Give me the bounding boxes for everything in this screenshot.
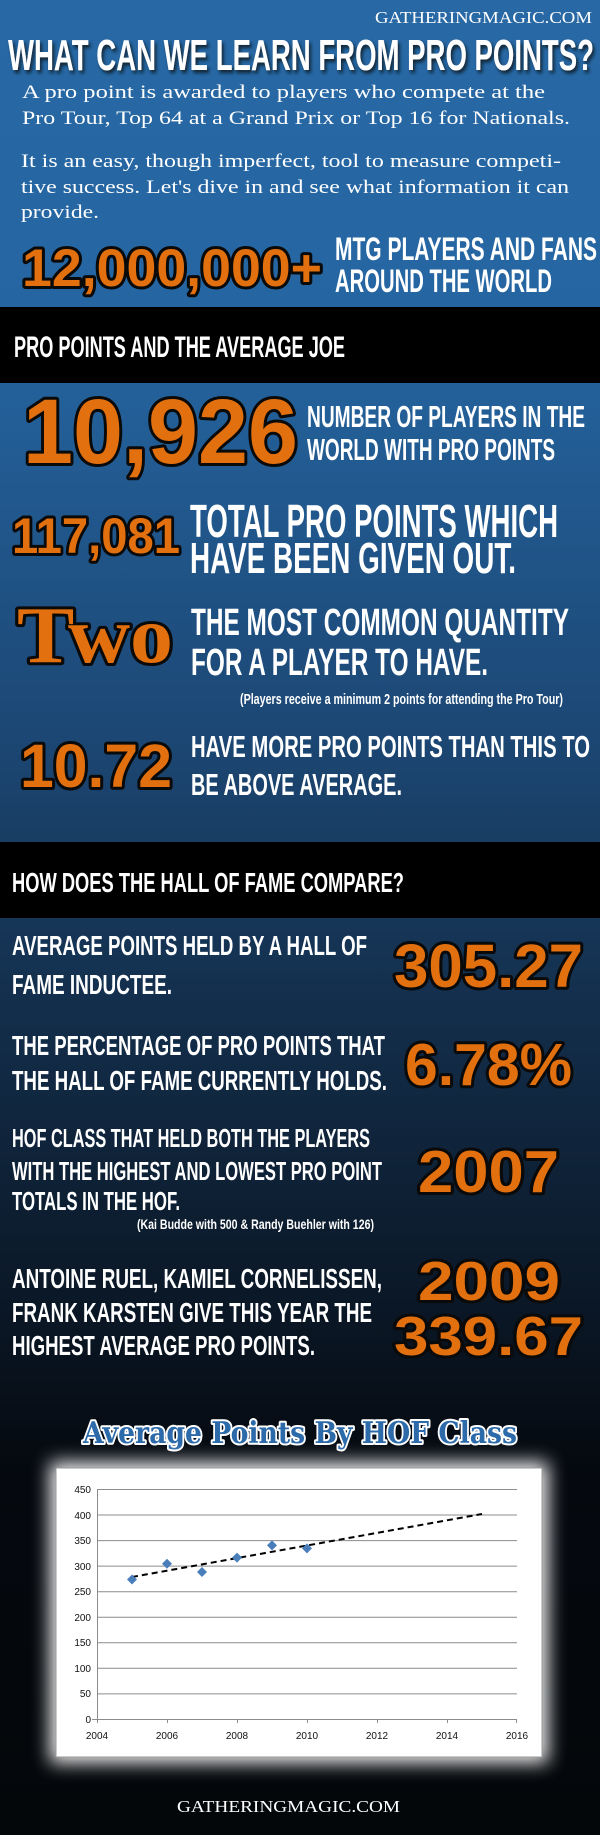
chart: average points by HOF class: 150	[74, 1638, 91, 1649]
hof stat: percentage: THE PERCENTAGE OF PRO POINTS THAT	[12, 1030, 385, 1061]
stat: 10.72: BE ABOVE AVERAGE.	[191, 767, 402, 802]
chart: average points by HOF class: 2008	[226, 1731, 249, 1742]
section band: average joe: PRO POINTS AND THE AVERAGE JOE	[14, 331, 345, 364]
hof stat: class 2009	[12, 1250, 583, 1367]
intro text: Pro Tour, Top 64 at a Grand Prix or Top 16 for Nationals.	[22, 108, 570, 129]
hof stat: average points: AVERAGE POINTS HELD BY A HALL OF	[12, 930, 367, 961]
hof stat: class 2009: 2009	[418, 1250, 560, 1312]
chart: average points by HOF class: 2012	[366, 1731, 389, 1742]
hof stat: class 2007: HOF CLASS THAT HELD BOTH THE PLAYERS	[12, 1123, 370, 1153]
chart: average points by HOF class: 400	[74, 1511, 91, 1522]
hof stat: class 2009: 339.67	[394, 1305, 583, 1367]
hof stat: class 2009: ANTOINE RUEL, KAMIEL CORNELISSEN,	[12, 1263, 382, 1294]
chart: average points by HOF class: 450	[74, 1485, 91, 1496]
hof stat: class 2007: 2007	[418, 1139, 559, 1205]
stat: 117,081: 117,081	[12, 508, 180, 564]
chart title: Average Points By HOF Class	[82, 1416, 517, 1451]
stat: 10,926: 10,926	[23, 381, 298, 483]
section band: average joe	[0, 307, 600, 383]
stat: Two: Two	[17, 592, 173, 680]
footer: site name: GATHERINGMAGIC.COM	[177, 1797, 400, 1816]
chart: average points by HOF class: 50	[80, 1689, 91, 1700]
header: site name: GATHERINGMAGIC.COM	[375, 8, 592, 27]
stat: 12,000,000+ players: 12,000,000+	[22, 239, 322, 298]
intro text: It is an easy, though imperfect, tool to measure competi-	[21, 151, 561, 172]
intro text: provide.	[21, 202, 99, 223]
chart: average points by HOF class: 2004	[86, 1731, 109, 1742]
intro text: tive success. Let's dive in and see what information it can	[21, 177, 570, 198]
hof stat: average points: FAME INDUCTEE.	[12, 969, 172, 1000]
hof stat: percentage	[12, 1030, 572, 1098]
chart: average points by HOF class: 2014	[436, 1731, 459, 1742]
chart: average points by HOF class: 250	[74, 1587, 91, 1598]
intro text: A pro point is awarded to players who compete at the	[22, 82, 545, 103]
hof stat: class 2007	[12, 1123, 559, 1232]
hof stat: class 2009: FRANK KARSTEN GIVE THIS YEAR THE	[12, 1297, 372, 1328]
section band: hall of fame: HOW DOES THE HALL OF FAME COMPARE?	[12, 867, 404, 898]
stat: 117,081	[12, 495, 558, 583]
hof stat: class 2007: WITH THE HIGHEST AND LOWEST PRO POINT	[12, 1156, 382, 1186]
stat: 10.72: 10.72	[20, 732, 172, 800]
hof stat: class 2009: HIGHEST AVERAGE PRO POINTS.	[12, 1330, 315, 1361]
stat: 10,926	[23, 381, 585, 483]
chart: average points by HOF class: 350	[74, 1536, 91, 1547]
hof stat: class 2007: TOTALS IN THE HOF.	[12, 1186, 180, 1216]
intro text	[21, 82, 570, 223]
chart: average points by HOF class: 300	[74, 1562, 91, 1573]
chart: average points by HOF class: 2016	[506, 1731, 529, 1742]
chart: average points by HOF class: 0	[85, 1715, 91, 1726]
hof stat: class 2007: (Kai Budde with 500 & Randy Buehler with 126)	[137, 1216, 374, 1232]
chart: average points by HOF class: 100	[74, 1664, 91, 1675]
chart: average points by HOF class: 2010	[296, 1731, 319, 1742]
chart: average points by HOF class: 200	[74, 1613, 91, 1624]
hof stat: average points: 305.27	[394, 932, 583, 1000]
stat: 10.72	[20, 729, 590, 802]
hof stat: percentage: 6.78%	[405, 1032, 572, 1098]
chart: average points by HOF class	[50, 1462, 548, 1763]
section band: hall of fame	[0, 842, 600, 918]
hof stat: average points	[12, 930, 583, 1000]
chart: average points by HOF class: 2006	[156, 1731, 179, 1742]
hof stat: percentage: THE HALL OF FAME CURRENTLY HOLDS.	[12, 1065, 387, 1096]
stat: Two	[17, 592, 569, 708]
stat: 12,000,000+ players	[22, 231, 597, 299]
